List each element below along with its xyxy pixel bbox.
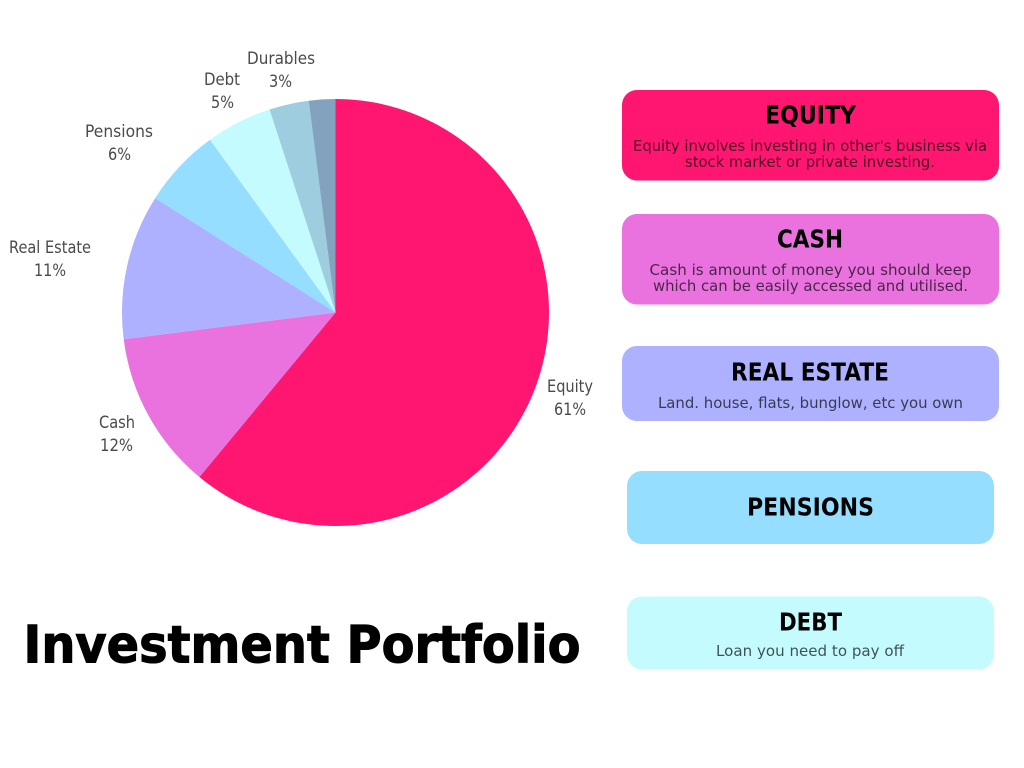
- label: real estate: 11%: [34, 260, 66, 280]
- label: durables: [247, 48, 315, 91]
- slice: equity 61%: [199, 99, 549, 526]
- description: cash: which can be easily accessed and utilised.: [653, 277, 968, 295]
- label: pensions: 6%: [108, 144, 131, 164]
- label: durables: Durables: [247, 48, 315, 68]
- label: real estate: Real Estate: [9, 237, 91, 257]
- label: pensions: [85, 121, 153, 164]
- panel: real estate: [622, 346, 999, 421]
- heading: pensions: PENSIONS: [747, 492, 874, 522]
- description: cash: Cash is amount of money you should keep: [650, 261, 972, 279]
- title: Investment Portfolio: [24, 616, 580, 676]
- panel: equity: [622, 90, 999, 180]
- label: cash: Cash: [99, 412, 135, 432]
- heading: real estate: REAL ESTATE: [731, 358, 889, 386]
- description: cash: [650, 261, 972, 295]
- pie chart: [122, 99, 549, 526]
- slice: durables 3%: [270, 101, 336, 313]
- label: cash: [99, 412, 135, 455]
- label: equity: Equity: [547, 376, 593, 396]
- description: equity: stock market or private investing.: [685, 153, 935, 171]
- heading: debt: DEBT: [779, 608, 842, 636]
- label: debt: [204, 69, 240, 112]
- heading: equity: EQUITY: [765, 100, 856, 130]
- label: real estate: [9, 237, 91, 280]
- label: equity: [547, 376, 593, 419]
- label: cash: 12%: [100, 435, 133, 455]
- panel: pensions: [627, 471, 994, 544]
- label: durables: 3%: [269, 71, 292, 91]
- panel: debt: [627, 596, 994, 670]
- slice: cash 12%: [124, 312, 335, 477]
- slice: real estate 11%: [122, 198, 336, 339]
- description: debt: Loan you need to pay off: [716, 642, 904, 660]
- label: debt: 5%: [211, 92, 234, 112]
- description: equity: [633, 137, 987, 171]
- slice: debt 5%: [210, 109, 336, 312]
- panel: cash: [622, 214, 999, 304]
- heading: cash: CASH: [777, 224, 843, 254]
- description: equity: Equity involves investing in other's business via: [633, 137, 987, 155]
- label: debt: Debt: [204, 69, 240, 89]
- slice: pensions 6%: [155, 140, 336, 312]
- label: pensions: Pensions: [85, 121, 153, 141]
- description: real estate: Land. house, flats, bunglow, etc you own: [658, 394, 963, 412]
- label: equity: 61%: [554, 399, 586, 419]
- slice: other 2%: [309, 99, 336, 312]
